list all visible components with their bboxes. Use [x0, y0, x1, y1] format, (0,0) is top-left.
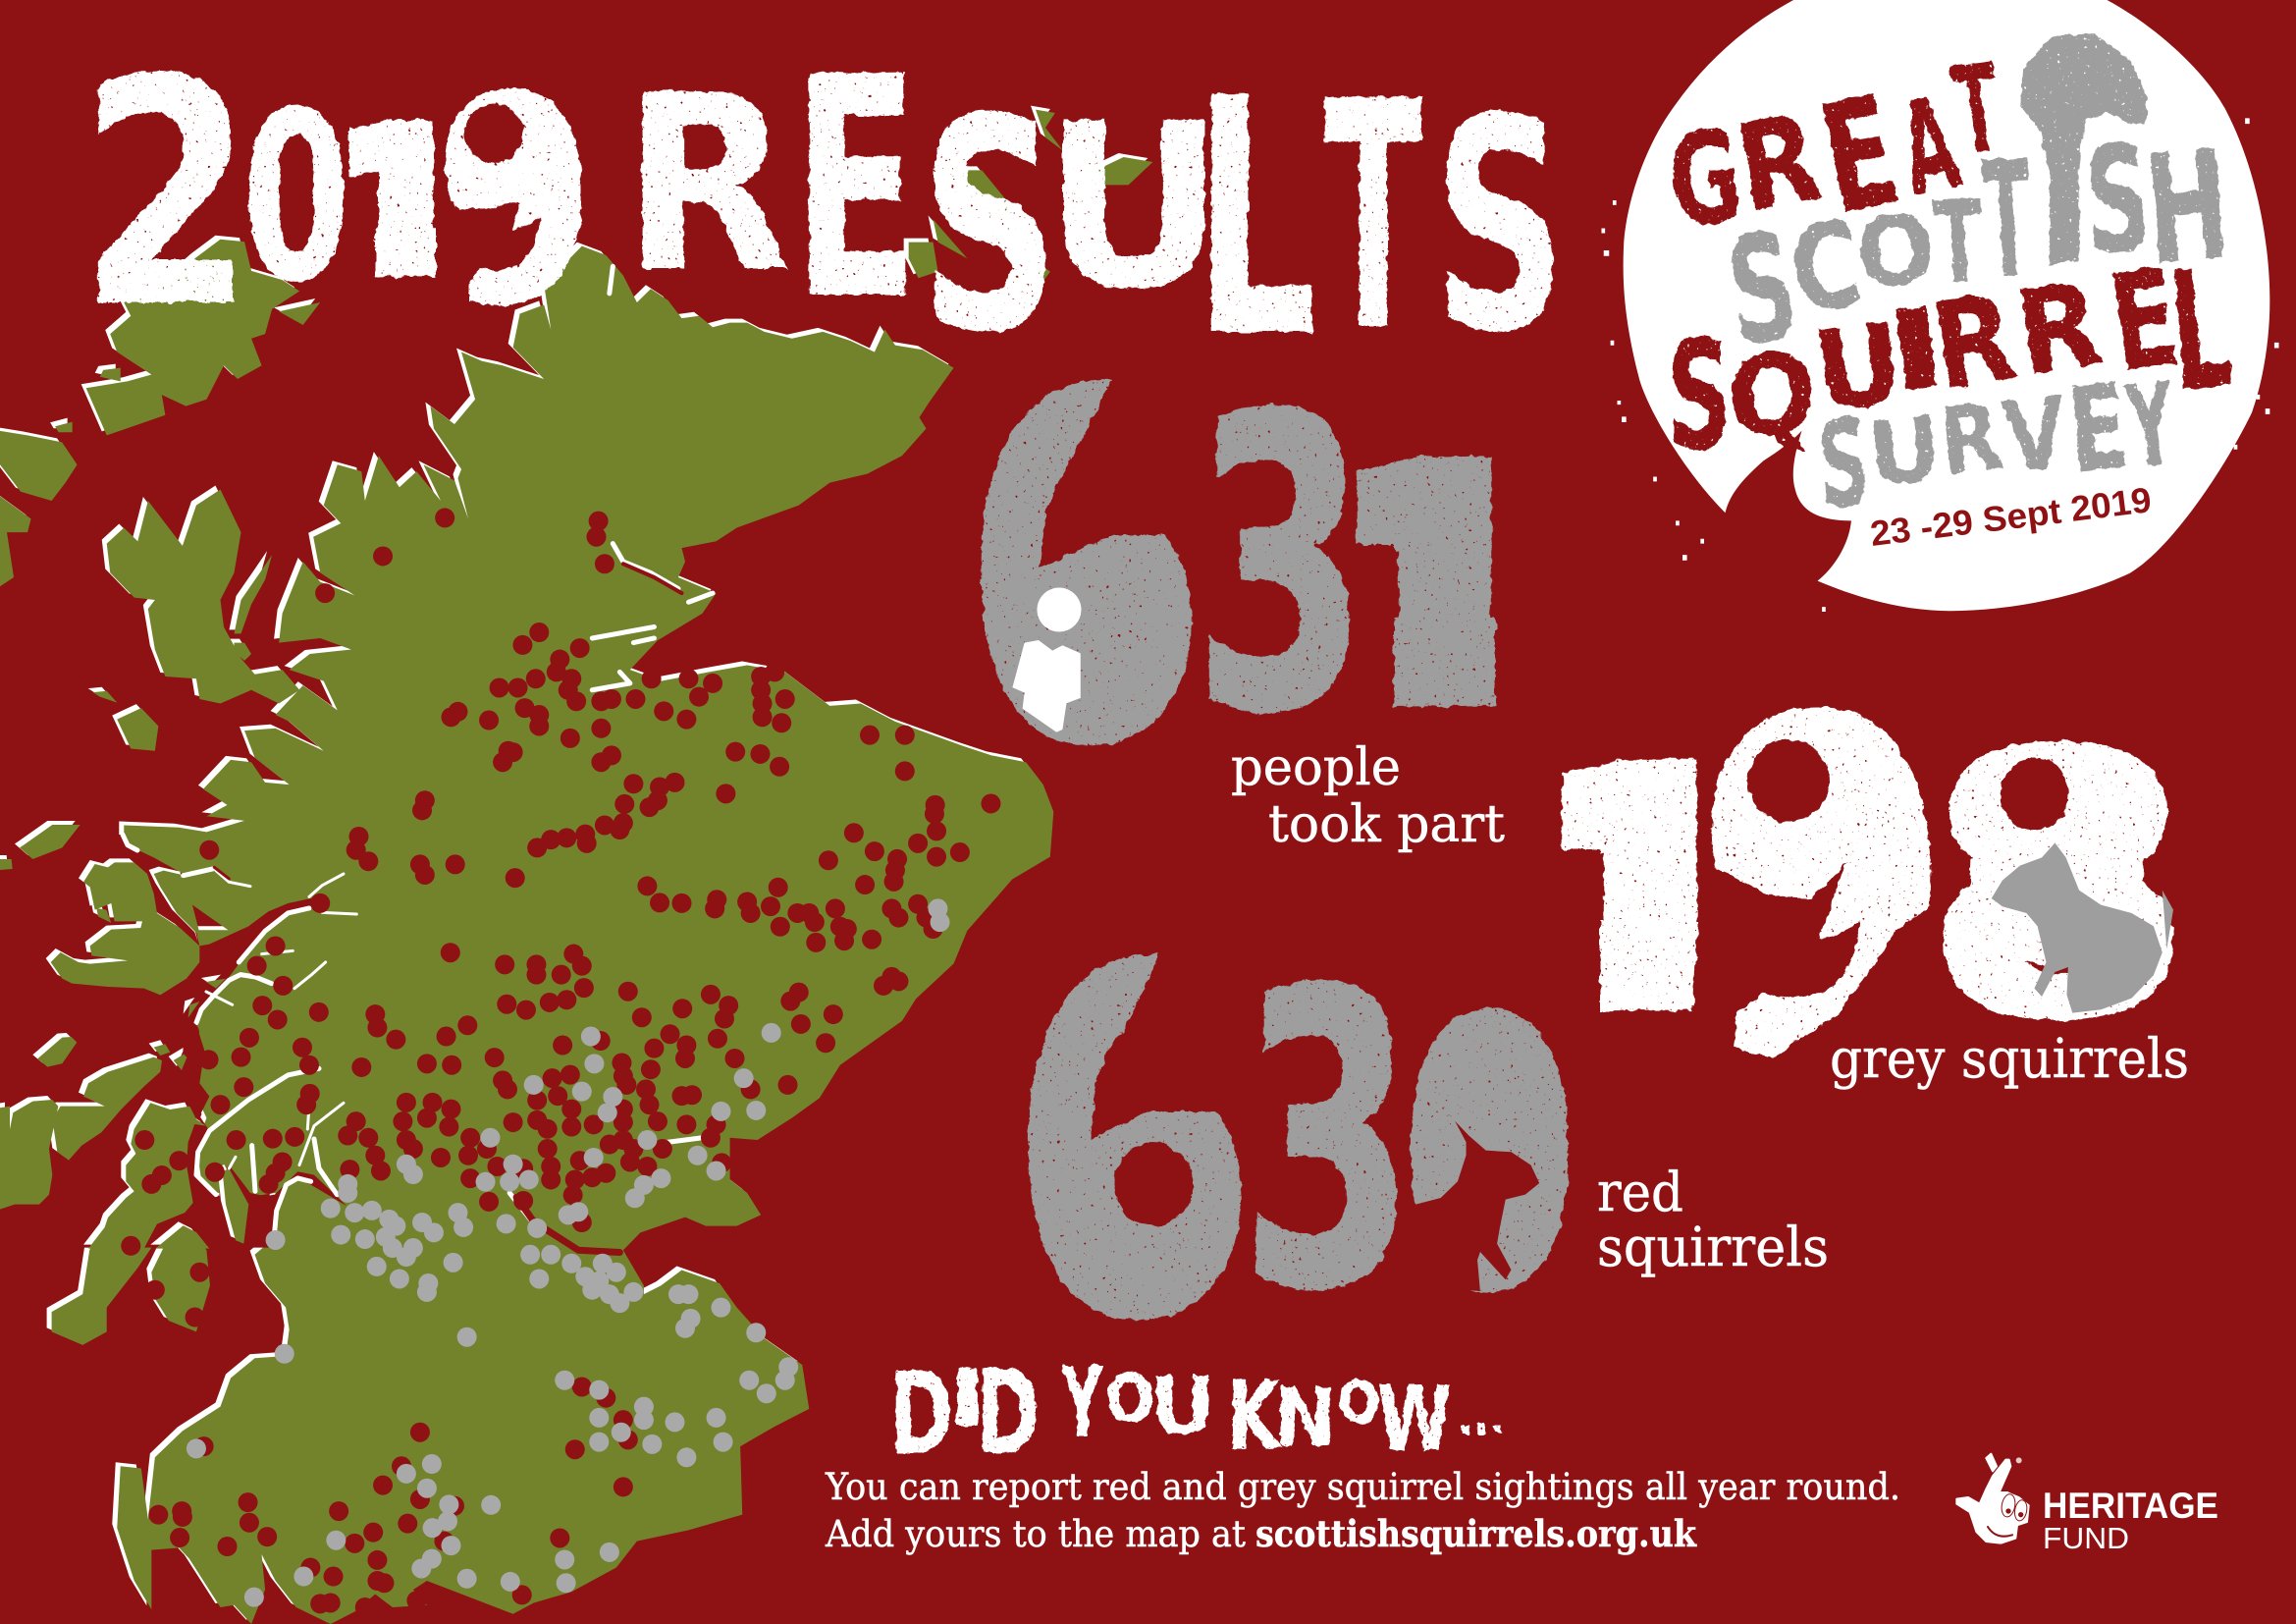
body text: how to report sightings: Add yours to the map at: [825, 1513, 1246, 1555]
number 631: 6: [961, 294, 1208, 850]
number 198: 1: [1559, 733, 1730, 1049]
title: 2019 RESULTS: 9: [433, 35, 597, 370]
logo word: SURVEY: R: [1935, 383, 2006, 496]
icon: red squirrel: [1410, 1121, 1539, 1291]
logo text: HERITAGE FUND: HERITAGE: [2043, 1486, 2218, 1526]
heading: did you know: U: [1149, 1361, 1215, 1453]
heading: did you know: D: [976, 1344, 1041, 1481]
logo word: GREAT: T: [1946, 37, 2009, 183]
heading: did you know: O: [1105, 1361, 1154, 1438]
body text: how to report sightings: You can report red and grey squirrel sightings all year round.: [825, 1466, 1900, 1508]
statistic: 630 red squirrels: [1008, 867, 1829, 1424]
label: red squirrels: squirrels: [1597, 1216, 1829, 1278]
map: west coast islands and peninsulas: [0, 825, 248, 1249]
icon: person: [1012, 587, 1082, 732]
number 631: [961, 294, 1571, 850]
logo: National Lottery Heritage Fund: [1956, 1454, 2218, 1555]
heading: did you know: ...: [1457, 1388, 1506, 1446]
logo word: SCOTTISH with tail: T: [1979, 126, 2036, 315]
logo word: SURVEY: S: [1814, 392, 1874, 536]
number 630: 0: [1400, 942, 1579, 1373]
number 630: 6: [1008, 867, 1258, 1424]
logo word: SQUIRREL: L: [2163, 233, 2238, 428]
logo word: GREAT: R: [1727, 87, 1830, 241]
logo: National Lottery Heritage Fund: FUND: [2043, 1521, 2129, 1555]
heading: did you know: Y: [1060, 1347, 1104, 1460]
statistic: 198 grey squirrels: [1531, 624, 2196, 1160]
logo word: SQUIRREL: R: [1924, 267, 2023, 418]
title: 2019 RESULTS: [79, 11, 1566, 409]
logo word: SQUIRREL: S: [1667, 308, 1732, 483]
heading: did you know: I: [947, 1352, 988, 1444]
title: 2019 RESULTS: R: [622, 43, 791, 326]
logo word: SCOTTISH with tail: H: [2139, 119, 2236, 299]
logo word: SCOTTISH with tail: S: [2080, 114, 2155, 288]
map: west coast sea: [0, 835, 347, 1248]
map of Scotland with sighting dots: [0, 106, 1152, 1624]
heading: did you know: [889, 1344, 1506, 1481]
title: 2019 RESULTS: 1: [342, 97, 461, 307]
number 631: 3: [1194, 331, 1367, 800]
title: 2019 RESULTS: T: [1324, 34, 1422, 401]
logo word: SCOTTISH with tail: O: [1852, 191, 1940, 311]
heading: did you know: D: [889, 1349, 954, 1481]
logo word: SURVEY: U: [1863, 398, 1947, 507]
title: 2019 RESULTS: U: [1042, 76, 1225, 340]
logo word: SURVEY: Y: [2120, 358, 2182, 495]
label: grey squirrels: grey squirrels: [1830, 1027, 2189, 1090]
title: 2019 RESULTS: 0: [241, 62, 351, 333]
logo word: SQUIRREL: U: [1806, 298, 1911, 438]
icon: grey squirrel: [1992, 842, 2173, 1013]
logo word: SCOTTISH with tail: S: [1718, 201, 1807, 380]
number 198: 8: [1921, 677, 2196, 1100]
body text: how to report sightings: scottishsquirrels.org.uk: [1255, 1512, 1697, 1555]
heading: did you know: K: [1227, 1361, 1283, 1471]
logo word: SCOTTISH with tail: [1718, 34, 2236, 380]
label: people took part: took part: [1268, 795, 1505, 854]
statistic: 631 people took part: [961, 294, 1571, 854]
logo word: SURVEY: E: [2062, 357, 2134, 500]
heading: did you know: W: [1377, 1368, 1452, 1473]
number 630: [1008, 867, 1579, 1424]
map: sea loch lines east: [509, 1138, 703, 1253]
logo word: SQUIRREL: R: [2008, 256, 2109, 404]
logo word: SQUIRREL: I: [1877, 282, 1956, 417]
logo word: SCOTTISH with tail: I: [2035, 112, 2094, 296]
icon: crossed-fingers hand: [1956, 1454, 2029, 1543]
map: red and grey squirrel dots, north: [209, 517, 990, 929]
logo word: GREAT: [1662, 37, 2009, 257]
logo word: GREAT: E: [1807, 62, 1912, 250]
logo word: GREAT: A: [1889, 70, 1970, 226]
map: west coast white highlight: [0, 821, 243, 1245]
label: red squirrels: red: [1597, 1161, 1683, 1223]
title: 2019 RESULTS: S: [921, 56, 1058, 398]
logo word: GREAT: G: [1662, 103, 1748, 257]
logo word: SURVEY: [1814, 357, 2182, 536]
label: red squirrels: [1597, 1161, 1829, 1278]
map: sea loch lines west: [123, 835, 356, 1247]
logo word: SQUIRREL: E: [2101, 240, 2188, 404]
bubble shape: [1601, 0, 2279, 612]
map: red and grey squirrel dots, south: [131, 940, 898, 1607]
map: green land: [0, 110, 1152, 1624]
label: people took part: [1231, 738, 1505, 854]
map: white coast highlight: [0, 106, 1148, 1620]
number 198: 9: [1694, 624, 1952, 1160]
title: 2019 RESULTS: E: [792, 11, 919, 367]
logo word: SCOTTISH with tail: C: [1783, 195, 1869, 341]
title: 2019 RESULTS: S: [1433, 55, 1566, 398]
speech bubble logo: Great Scottish Squirrel Survey: [1601, 0, 2279, 612]
heading: did you know: N: [1274, 1371, 1337, 1465]
heading: did you know: O: [1337, 1370, 1381, 1435]
logo word: SQUIRREL: [1667, 233, 2238, 483]
logo word: SQUIRREL: Q: [1728, 332, 1816, 460]
number 630: 3: [1241, 905, 1415, 1378]
label: people took part: people: [1231, 738, 1401, 797]
title: 2019 RESULTS: 2: [79, 14, 254, 377]
logo word: SURVEY: V: [1999, 377, 2071, 497]
logo word: SCOTTISH with tail: T: [1931, 176, 1986, 310]
number 198: [1531, 624, 2196, 1160]
map: sea loch lines north: [592, 266, 713, 690]
body text: how to report sightings: [825, 1466, 1900, 1555]
survey dates: 23 -29 Sept 2019: [1868, 479, 2154, 554]
title: 2019 RESULTS: L: [1194, 28, 1317, 409]
number 631: 1: [1354, 430, 1524, 743]
